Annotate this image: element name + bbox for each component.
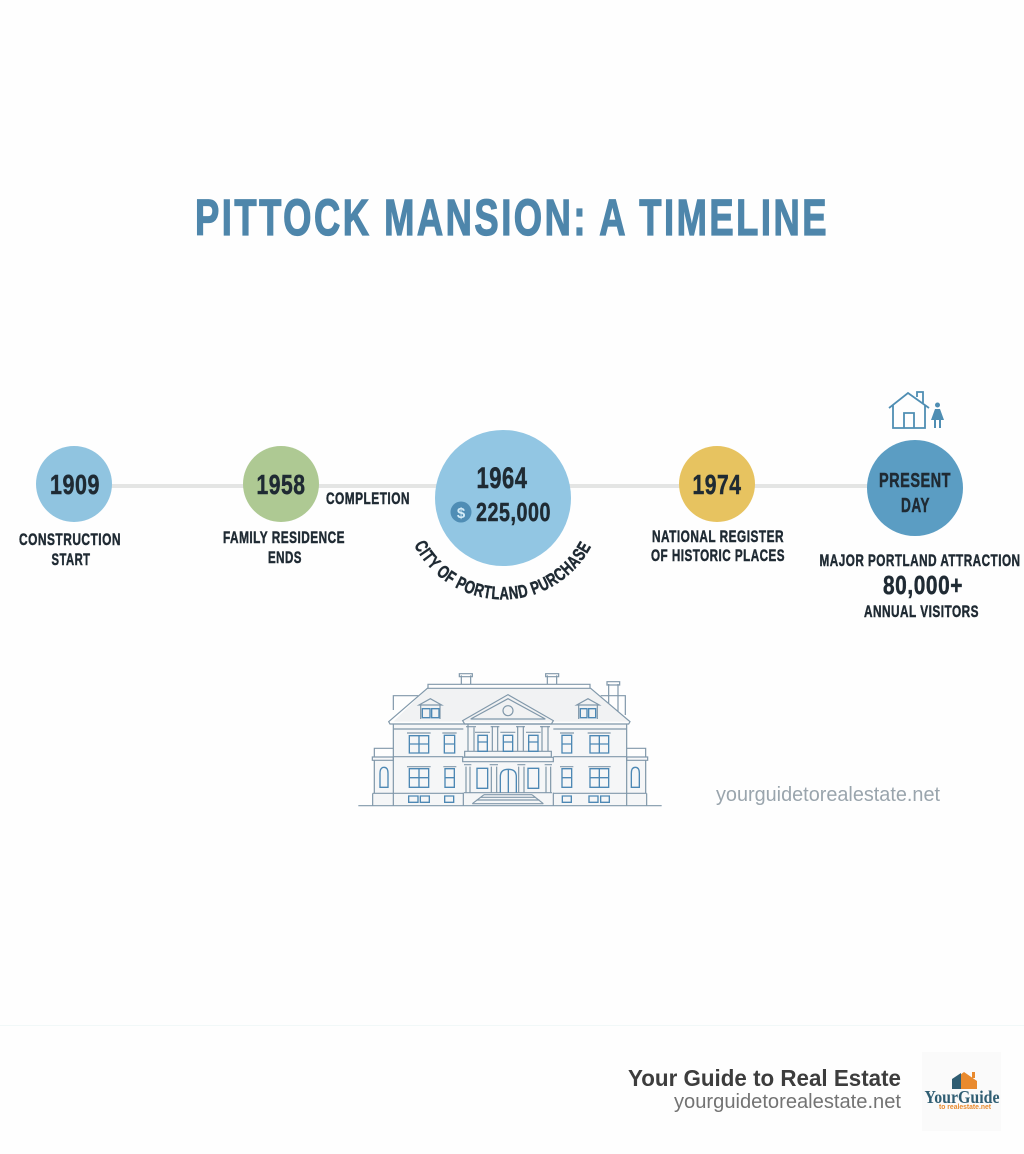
marker circle 1909 xyxy=(36,446,112,522)
label construction start: CONSTRUCTION xyxy=(19,530,121,549)
logo tagline: to realestate.net xyxy=(939,1104,992,1111)
marker circle 1974 xyxy=(679,446,755,522)
marker circle present day xyxy=(867,440,963,536)
timeline connector line xyxy=(100,484,880,488)
year 1964: 1964 xyxy=(476,462,528,495)
marker circle 1964 xyxy=(435,430,571,566)
icon: logo house xyxy=(952,1072,977,1089)
label present day: DAY xyxy=(901,494,930,517)
marker circle 1958 xyxy=(243,446,319,522)
footer logo xyxy=(922,1052,1001,1131)
label national register: OF HISTORIC PLACES xyxy=(651,546,785,565)
label family residence ends: ENDS xyxy=(268,548,302,567)
footer divider xyxy=(0,1025,1024,1026)
label construction start: START xyxy=(52,550,90,569)
milestone present day xyxy=(820,392,1020,621)
year 1958: 1958 xyxy=(256,469,306,500)
curved label xyxy=(414,545,592,599)
milestone 1974 xyxy=(651,446,785,565)
illustration: mansion xyxy=(358,674,662,806)
label family residence ends: FAMILY RESIDENCE xyxy=(223,528,345,547)
label present day: PRESENT xyxy=(879,469,951,492)
icon: dollar coin xyxy=(450,502,472,522)
icon: dollar coin: $ xyxy=(457,505,466,522)
milestone 1964: CITY OF PORTLAND PURCHASE xyxy=(415,540,592,600)
watermark url: yourguidetorealestate.net xyxy=(716,783,940,806)
footer url: yourguidetorealestate.net xyxy=(674,1091,901,1113)
label national register: NATIONAL REGISTER xyxy=(652,527,784,546)
label completion: COMPLETION xyxy=(326,489,410,508)
purchase price: 225,000 xyxy=(476,499,551,527)
footer brand name: Your Guide to Real Estate xyxy=(628,1065,901,1091)
milestone 1964 xyxy=(415,430,592,600)
milestone 1958 xyxy=(223,446,345,567)
icon: house and person xyxy=(889,392,944,428)
year 1909: 1909 xyxy=(50,469,100,500)
milestone 1909 xyxy=(19,446,121,569)
logo tile xyxy=(922,1052,1001,1131)
year 1974: 1974 xyxy=(692,469,742,500)
logo wordmark: YourGuide xyxy=(924,1087,1000,1107)
visitor count: 80,000+ xyxy=(883,572,963,600)
